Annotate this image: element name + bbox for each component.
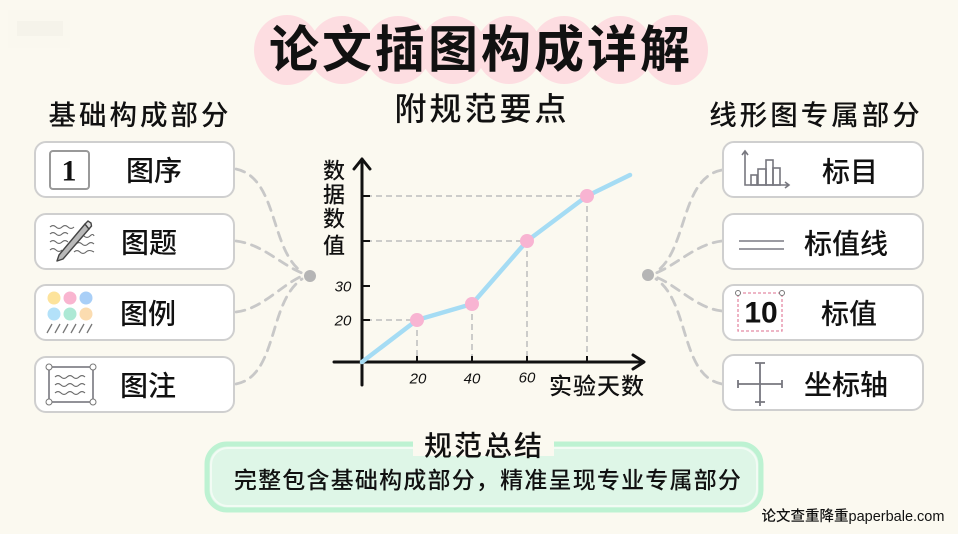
icon: value frame — [736, 290, 784, 331]
connectors: left — [236, 169, 316, 384]
card: scale value: 标值 — [821, 298, 877, 330]
x axis labels: 20 — [409, 370, 427, 388]
y axis title — [323, 158, 345, 258]
card: axis: 坐标轴 — [804, 370, 888, 400]
card: scale line: 标值线 — [804, 228, 888, 260]
icon: value frame: 10 — [744, 296, 778, 330]
heading: requirements: 附规范要点 — [394, 91, 570, 127]
title text: 论文插图构成详解 — [269, 22, 693, 78]
connectors: right — [642, 170, 722, 384]
icon: number box: 1 — [62, 154, 76, 188]
icon: bar chart — [742, 151, 789, 188]
data line — [362, 175, 630, 362]
heading: basic parts: 基础构成部分 — [48, 100, 232, 130]
summary heading: 规范总结 — [424, 430, 544, 462]
x axis labels: 40 — [464, 370, 481, 388]
icon: double line — [739, 241, 784, 249]
y axis labels: 20 — [334, 312, 352, 330]
summary text: 完整包含基础构成部分，精准呈现专业专属部分 — [234, 467, 742, 493]
heading: line chart parts: 线形图专属部分 — [709, 100, 923, 130]
x axis labels — [409, 370, 536, 388]
panel: line chart parts — [723, 142, 923, 410]
card: figure title: 图题 — [121, 228, 177, 258]
blurred logo patch — [8, 10, 70, 48]
card: chart title — [723, 142, 923, 197]
card: legend: 图例 — [120, 298, 176, 330]
y axis title: 数 — [323, 206, 345, 232]
x axis labels: 60 — [519, 370, 536, 386]
y axis labels — [334, 278, 352, 330]
y axis title: 数 — [323, 158, 345, 184]
card: chart title: 标目 — [822, 156, 878, 188]
line chart — [323, 158, 645, 399]
card: scale line — [723, 214, 923, 269]
card: note — [35, 357, 234, 412]
card: note: 图注 — [120, 370, 176, 402]
x axis title: 实验天数 — [549, 373, 645, 399]
y axis title: 值 — [323, 234, 345, 258]
icon: colour swatches — [47, 292, 92, 333]
y axis labels: 30 — [335, 278, 352, 296]
card: legend — [35, 285, 234, 340]
guide lines — [366, 196, 587, 362]
icon: number box — [50, 151, 89, 189]
icon: pencil and text — [50, 221, 94, 261]
icon: cross axes — [738, 363, 782, 406]
summary box — [207, 430, 761, 510]
icon: note frame — [46, 364, 96, 405]
card: figure number: 图序 — [126, 156, 182, 186]
watermark: 论文查重降重paperbale.com — [762, 507, 944, 525]
y axis title: 据 — [323, 182, 345, 208]
card: scale value — [723, 285, 923, 340]
panel: basic parts — [35, 142, 234, 412]
card: axis — [723, 355, 923, 410]
title pink scalloped background — [254, 15, 708, 85]
axes — [334, 159, 644, 385]
card: figure number — [35, 142, 234, 197]
card: figure title — [35, 214, 234, 269]
data points — [410, 189, 594, 327]
title — [254, 15, 708, 85]
